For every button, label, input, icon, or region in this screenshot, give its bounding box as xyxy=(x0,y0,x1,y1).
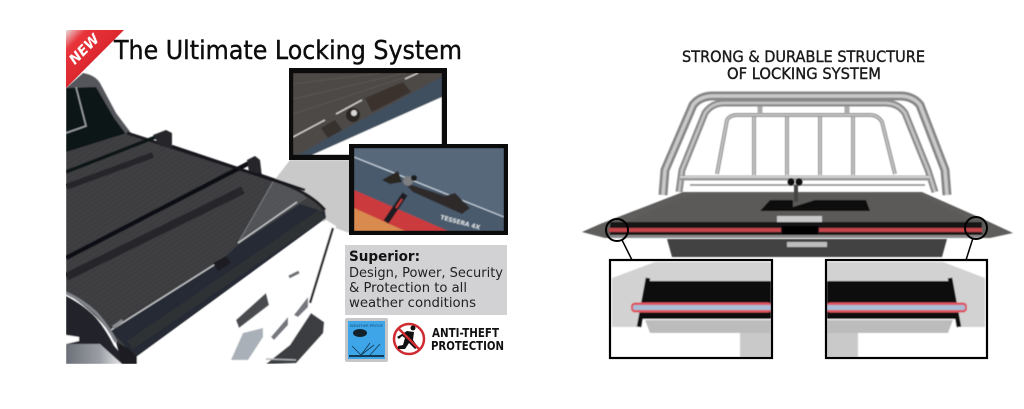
heading: strong and durable structure xyxy=(682,47,925,83)
rear tonneau cover xyxy=(582,178,1013,257)
pointer: left xyxy=(622,240,632,260)
roll bar xyxy=(663,96,947,195)
icon: weather proof xyxy=(345,318,388,362)
badge: NEW ribbon: NEW xyxy=(66,31,103,68)
text block: Superior xyxy=(345,245,507,315)
heading: strong and durable structure: OF LOCKING SYSTEM xyxy=(727,64,881,83)
label: anti-theft protection: ANTI-THEFT xyxy=(432,325,499,340)
keys xyxy=(788,178,802,202)
text block: Superior: weather conditions xyxy=(349,295,476,311)
label: anti-theft protection xyxy=(431,325,504,353)
cover latch block xyxy=(213,256,231,271)
lock plates xyxy=(760,200,870,211)
inset: right end of lock bar xyxy=(826,260,987,358)
inset: lock with key close-up xyxy=(349,144,508,235)
heading: strong and durable structure: STRONG & DURABLE STRUCTURE xyxy=(682,47,925,66)
tailgate xyxy=(137,220,336,364)
callout circle: right xyxy=(965,217,987,239)
inset: lock close-up xyxy=(289,68,447,160)
callout wedge xyxy=(273,160,352,234)
icon: weather proof: WEATHER PROOF xyxy=(350,324,383,328)
label: anti-theft protection: PROTECTION xyxy=(431,338,504,353)
text block: Superior: & Protection to all xyxy=(349,280,467,296)
roof rack bars xyxy=(66,130,305,277)
rear bumper xyxy=(266,313,324,364)
brand lettering on rail: TESSERA 4X xyxy=(439,214,481,232)
inset: left end of lock bar xyxy=(610,260,772,358)
text block: Superior: Design, Power, Security xyxy=(349,265,503,281)
pointer: right xyxy=(966,238,973,260)
tonneau cover xyxy=(66,133,326,364)
title: The Ultimate Locking System: The Ultimate Locking System xyxy=(113,36,462,66)
badge: NEW ribbon xyxy=(66,30,124,88)
truck cab xyxy=(66,73,134,158)
text block: Superior: Superior: xyxy=(349,249,420,265)
logo patch on the cover corner xyxy=(112,319,123,329)
lower body xyxy=(66,342,137,364)
lower bumper xyxy=(667,239,947,257)
callout circle: left xyxy=(606,219,628,241)
icon: no thief sign xyxy=(394,324,424,354)
black strip with red lines xyxy=(610,222,982,235)
panel: truck tonneau photo xyxy=(66,73,352,364)
